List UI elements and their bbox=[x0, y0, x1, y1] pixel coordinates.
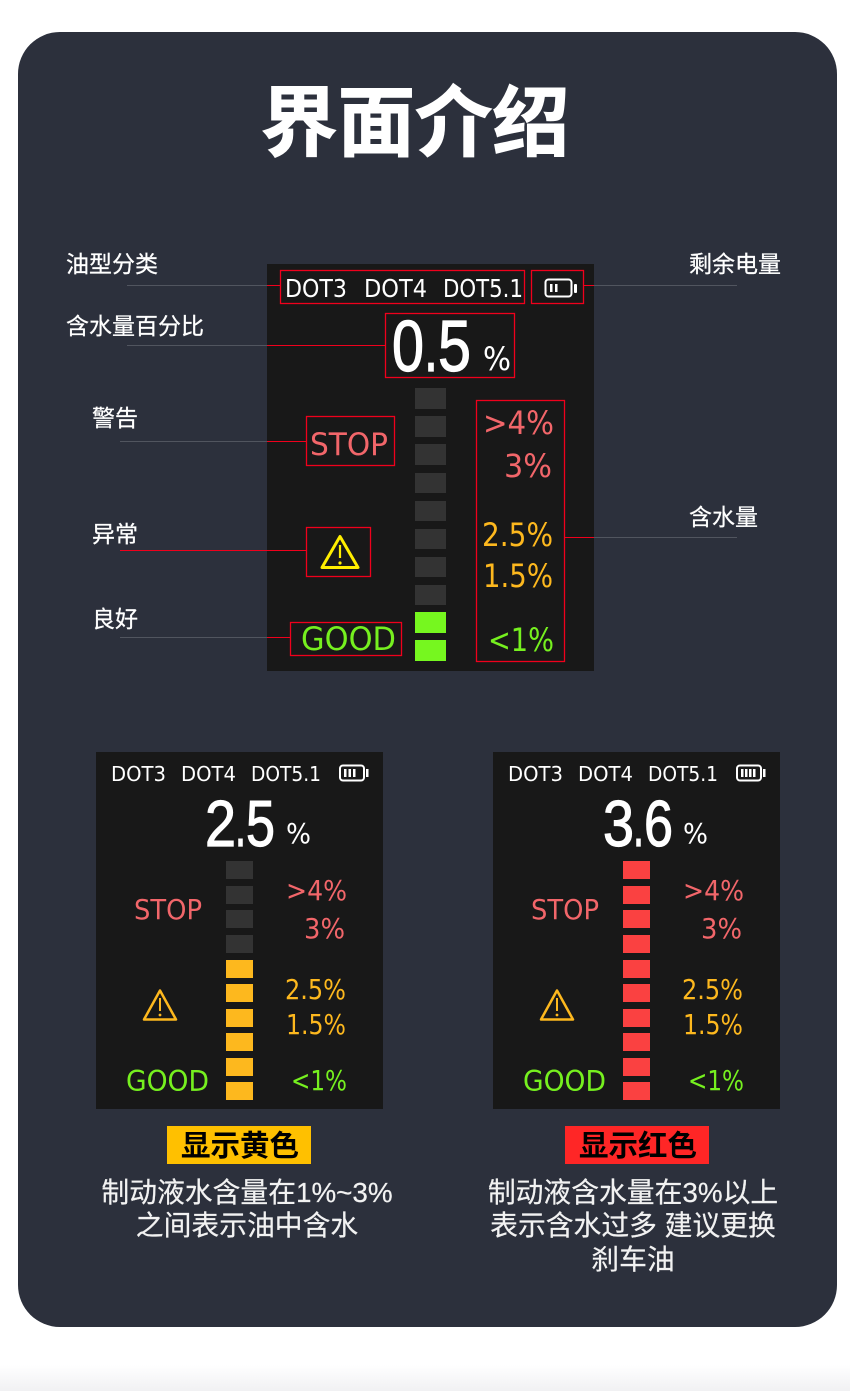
highlight: percentage bbox=[386, 314, 514, 378]
water content scale: >4% bbox=[683, 874, 744, 907]
DOT type labels bbox=[285, 274, 523, 303]
water content scale: <1% bbox=[488, 621, 554, 659]
reading: water percentage: 5 bbox=[438, 307, 471, 387]
water content scale: <1% bbox=[688, 1064, 744, 1097]
icon: battery bbox=[546, 280, 577, 296]
highlight: battery bbox=[532, 270, 584, 304]
reading: 3.6 percent: 3 bbox=[603, 787, 634, 860]
DOT type labels: DOT5.1 bbox=[251, 762, 321, 786]
DOT type labels: DOT5.1 bbox=[648, 762, 718, 786]
level bar bbox=[226, 861, 253, 1100]
title: 界面介绍 bbox=[260, 81, 570, 167]
water content scale bbox=[285, 874, 347, 1097]
water content scale bbox=[682, 874, 744, 1097]
reading: 2.5 percent bbox=[205, 787, 311, 860]
text: yellow description bbox=[101, 1177, 393, 1241]
highlight: oil type bbox=[280, 270, 524, 304]
reading: water percentage: 0 bbox=[392, 307, 424, 387]
text: yellow description: 制动液水含量在1%~3% bbox=[101, 1177, 393, 1208]
water content scale: 3% bbox=[504, 447, 552, 485]
DOT type labels: DOT3 bbox=[285, 274, 347, 303]
tag: shows red: 显示红色 bbox=[579, 1130, 697, 1163]
reading: 3.6 percent: 6 bbox=[644, 787, 673, 860]
text: red description: 制动液含水量在3%以上 bbox=[488, 1177, 778, 1208]
icon: battery bbox=[340, 766, 368, 780]
label: good: 良好 bbox=[92, 606, 138, 632]
icon: warning triangle bbox=[322, 536, 358, 568]
label: water percentage: 含水量百分比 bbox=[66, 313, 204, 339]
label: abnormal: 异常 bbox=[92, 521, 138, 547]
highlight: STOP bbox=[306, 416, 394, 466]
reading: water percentage: . bbox=[424, 307, 438, 387]
water content scale: 3% bbox=[701, 912, 742, 945]
water content scale: 3% bbox=[304, 912, 345, 945]
highlight: warning bbox=[306, 528, 370, 576]
label: remaining battery: 剩余电量 bbox=[689, 251, 781, 277]
DOT type labels: DOT4 bbox=[181, 762, 236, 786]
text: red description: 刹车油 bbox=[591, 1244, 675, 1275]
water content scale: <1% bbox=[291, 1064, 347, 1097]
water content scale: >4% bbox=[286, 874, 347, 907]
water content scale: 2.5% bbox=[482, 516, 553, 554]
reading: 2.5 percent: % bbox=[286, 817, 311, 850]
icon: warning triangle bbox=[144, 990, 176, 1020]
DOT type labels bbox=[508, 762, 718, 786]
water content scale: 2.5% bbox=[285, 973, 346, 1006]
label: warning: 警告 bbox=[92, 405, 138, 431]
reading: 2.5 percent: 2 bbox=[205, 787, 236, 860]
text: yellow description: 之间表示油中含水 bbox=[136, 1210, 358, 1241]
DOT type labels: DOT4 bbox=[364, 274, 427, 303]
reading: 3.6 percent bbox=[603, 787, 708, 860]
reading: 3.6 percent: % bbox=[683, 817, 708, 850]
reading: 2.5 percent: . bbox=[235, 787, 246, 860]
highlight: GOOD bbox=[290, 622, 402, 656]
text: red description: 表示含水过多 建议更换 bbox=[490, 1210, 776, 1241]
STOP label: STOP bbox=[531, 894, 599, 926]
water content scale: >4% bbox=[483, 404, 554, 442]
reading: water percentage bbox=[392, 307, 511, 387]
label: water content: 含水量 bbox=[689, 504, 758, 530]
highlight: water content bbox=[476, 400, 564, 662]
DOT type labels: DOT4 bbox=[578, 762, 633, 786]
GOOD label: GOOD bbox=[523, 1065, 606, 1098]
text: red description bbox=[488, 1177, 778, 1275]
reading: 2.5 percent: 5 bbox=[246, 787, 275, 860]
DOT type labels: DOT3 bbox=[111, 762, 166, 786]
DOT type labels: DOT5.1 bbox=[443, 274, 523, 303]
tag: shows yellow: 显示黄色 bbox=[181, 1130, 299, 1163]
water content scale: 2.5% bbox=[682, 973, 743, 1006]
reading: 3.6 percent: . bbox=[633, 787, 644, 860]
panel: yellow state screen bbox=[96, 752, 383, 1109]
level bar bbox=[623, 861, 650, 1100]
water content scale: 1.5% bbox=[286, 1008, 346, 1041]
level bar bbox=[415, 388, 446, 661]
panel: red state screen bbox=[493, 752, 780, 1109]
label: oil type: 油型分类 bbox=[66, 251, 158, 277]
water content scale: 1.5% bbox=[683, 1008, 743, 1041]
water content scale bbox=[482, 404, 554, 659]
STOP label: STOP bbox=[310, 427, 388, 463]
STOP label: STOP bbox=[134, 894, 202, 926]
DOT type labels bbox=[111, 762, 321, 786]
reading: water percentage: % bbox=[483, 340, 511, 378]
GOOD label: GOOD bbox=[126, 1065, 209, 1098]
water content scale: 1.5% bbox=[483, 557, 553, 595]
icon: warning triangle bbox=[541, 990, 573, 1020]
panel: main device screen bbox=[267, 264, 594, 671]
GOOD label: GOOD bbox=[301, 620, 396, 658]
DOT type labels: DOT3 bbox=[508, 762, 563, 786]
icon: battery bbox=[737, 766, 766, 780]
